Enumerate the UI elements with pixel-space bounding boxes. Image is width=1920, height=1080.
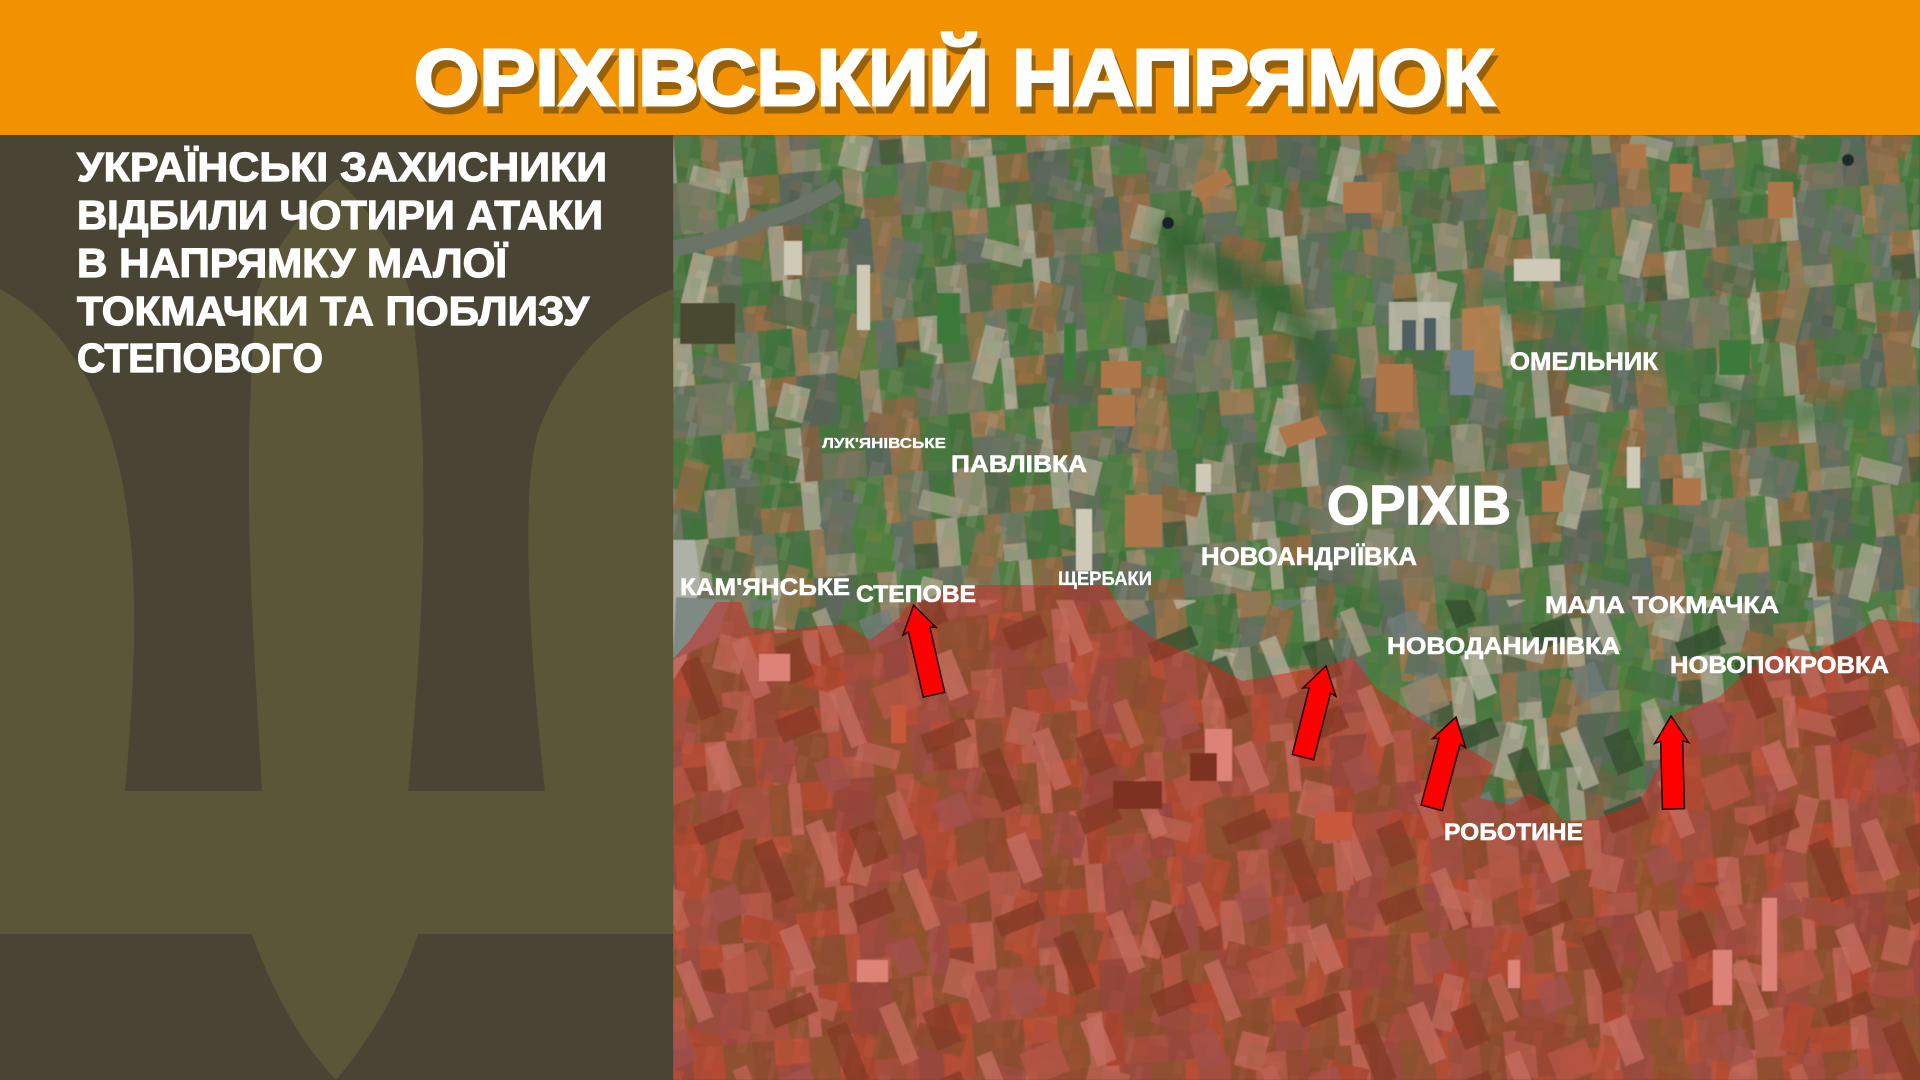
summary text: ВІДБИЛИ ЧОТИРИ АТАКИ: [77, 192, 603, 238]
header banner: [0, 0, 1920, 135]
arrow: Stepove: [897, 601, 951, 698]
map label: Mala Tokmachka: МАЛА ТОКМАЧКА: [1545, 592, 1779, 619]
title: ОРІХІВСЬКИЙ НАПРЯМОК: [414, 32, 1494, 122]
summary text: УКРАЇНСЬКІ ЗАХИСНИКИ: [77, 144, 607, 190]
title: ОРІХІВСЬКИЙ НАПРЯМОК: [418, 39, 1498, 129]
map label: Lukianivske: ЛУК'ЯНІВСЬКЕ: [822, 435, 946, 452]
map label: Omelnyk: ОМЕЛЬНИК: [1510, 348, 1659, 376]
map: satellite fields: [673, 135, 1920, 1080]
map label: Novopokrovka: НОВОПОКРОВКА: [1670, 652, 1889, 679]
map label: Pavlivka: ПАВЛІВКА: [951, 451, 1087, 478]
map label: Orikhiv: ОРІХІВ: [1327, 474, 1511, 536]
summary text: [77, 144, 607, 381]
map label: Novodanylivka: НОВОДАНИЛІВКА: [1387, 633, 1620, 660]
summary text: В НАПРЯМКУ МАЛОЇ: [77, 240, 509, 286]
map label: Novoandriivka: НОВОАНДРІЇВКА: [1201, 543, 1417, 571]
map label: Robotyne: РОБОТИНЕ: [1444, 819, 1583, 846]
summary text: ТОКМАЧКИ ТА ПОБЛИЗУ: [77, 288, 590, 334]
map label: Kamianske: КАМ'ЯНСЬКЕ: [680, 574, 850, 601]
map label: Shcherbaky: ЩЕРБАКИ: [1058, 569, 1152, 590]
summary text: СТЕПОВОГО: [77, 335, 323, 381]
occupied territory overlay: [673, 585, 1920, 1080]
arrow: Robotyne west: [1415, 713, 1472, 812]
arrow: Novoandriivka: [1286, 662, 1342, 761]
icon: trident watermark: [0, 179, 673, 1080]
map label: Stepove: СТЕПОВЕ: [856, 581, 976, 608]
left panel background: [0, 135, 674, 1080]
arrow: Novopokrovka: [1654, 716, 1690, 809]
